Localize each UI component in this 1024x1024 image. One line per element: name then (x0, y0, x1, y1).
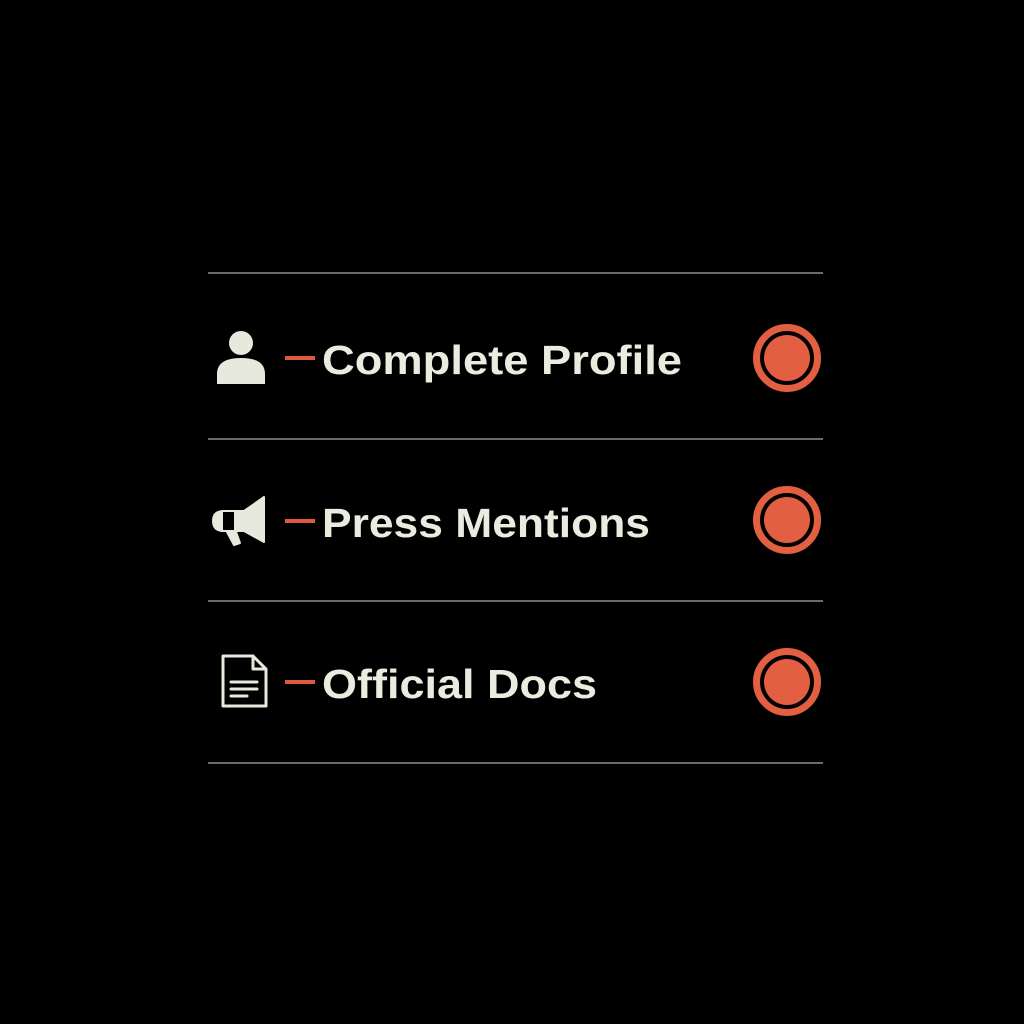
row: complete profile (217, 328, 818, 388)
label: Official Docs (322, 661, 597, 707)
row: official docs (223, 652, 818, 712)
icon: person (217, 331, 265, 384)
row: press mentions (213, 490, 818, 550)
label: Press Mentions (322, 500, 650, 546)
dash (285, 680, 315, 684)
dash (285, 519, 315, 523)
status circle (756, 652, 818, 712)
dash (285, 356, 315, 360)
icon: megaphone (213, 497, 264, 545)
label: Complete Profile (322, 337, 682, 383)
icon: document (223, 656, 266, 706)
status circle (756, 490, 818, 550)
status circle (756, 328, 818, 388)
